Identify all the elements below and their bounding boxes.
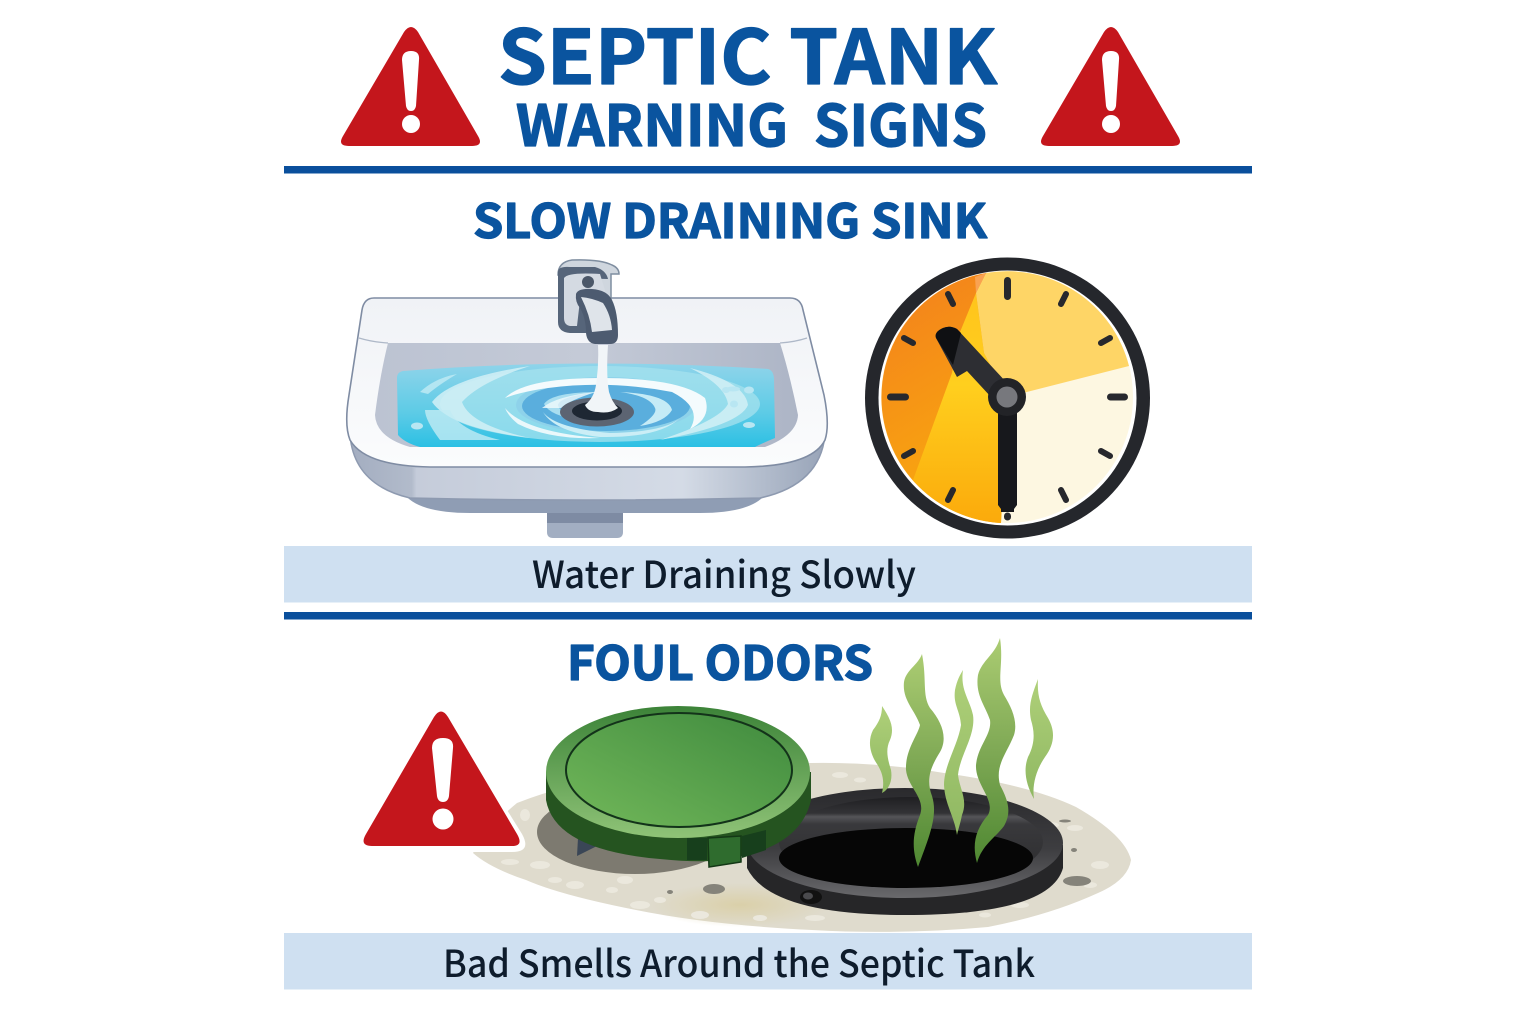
- odor wisp 2: [904, 654, 944, 867]
- sink body front: [350, 435, 825, 500]
- caption bar: bad smells: Bad Smells Around the Septic Tank: [443, 934, 1035, 988]
- elapsed sector: light yellow: [976, 271, 1129, 397]
- water swirls: [420, 366, 760, 442]
- clock face: [881, 271, 1133, 523]
- heading: foul odors: FOUL ODORS: [567, 625, 873, 694]
- ground stones: [667, 820, 1091, 894]
- clock bezel: [865, 258, 1150, 538]
- water stream: [585, 345, 618, 412]
- riser ring top: [747, 788, 1063, 898]
- title: SEPTIC TANK: [498, 0, 998, 106]
- minute hand: [998, 397, 1017, 512]
- sink lower bowl: [405, 495, 765, 513]
- ground patch: [473, 763, 1131, 932]
- warning triangle right: [1041, 27, 1180, 146]
- sink drain pipe: [547, 510, 623, 538]
- ring bolt: [800, 890, 822, 904]
- elapsed sector: orange: [881, 273, 1007, 523]
- clock hub: [988, 378, 1026, 416]
- faucet base: [558, 260, 619, 300]
- lid side: [546, 772, 811, 861]
- water droplets: [411, 386, 755, 430]
- icon: clock: [865, 258, 1150, 538]
- riser ring side: [747, 845, 1063, 915]
- heading: slow draining sink: SLOW DRAINING SINK: [473, 183, 988, 252]
- faucet spout: [576, 289, 618, 344]
- odor wisp 3: [944, 670, 973, 835]
- hour hand: [936, 327, 1007, 397]
- icon: sink: [347, 260, 827, 538]
- lid top: [546, 706, 810, 838]
- sink rim: [347, 298, 827, 467]
- caption bar: water draining slowly: Water Draining Slowly: [532, 545, 916, 599]
- warning triangle left: [341, 27, 480, 146]
- drain: [560, 398, 634, 426]
- tank opening: [779, 797, 1043, 887]
- warning triangle lower: [361, 711, 525, 852]
- caption bar: water draining slowly: [284, 545, 1252, 602]
- odor wisp 5: [1026, 679, 1053, 799]
- ground speckles: [501, 772, 1109, 921]
- water: [397, 363, 775, 447]
- lid prop: [577, 838, 597, 856]
- sink basin: [375, 343, 798, 447]
- lid shadow: [537, 790, 733, 874]
- lid tabs: [687, 830, 766, 860]
- elapsed sector: gold: [913, 293, 1007, 523]
- caption bar: bad smells: [284, 933, 1252, 990]
- odor wisp 4: [975, 638, 1015, 863]
- odor wisp 1: [870, 706, 892, 793]
- clock ticks: [890, 280, 1124, 517]
- illustration: open septic tank: [473, 638, 1131, 932]
- subtitle: WARNING SIGNS: [516, 81, 987, 163]
